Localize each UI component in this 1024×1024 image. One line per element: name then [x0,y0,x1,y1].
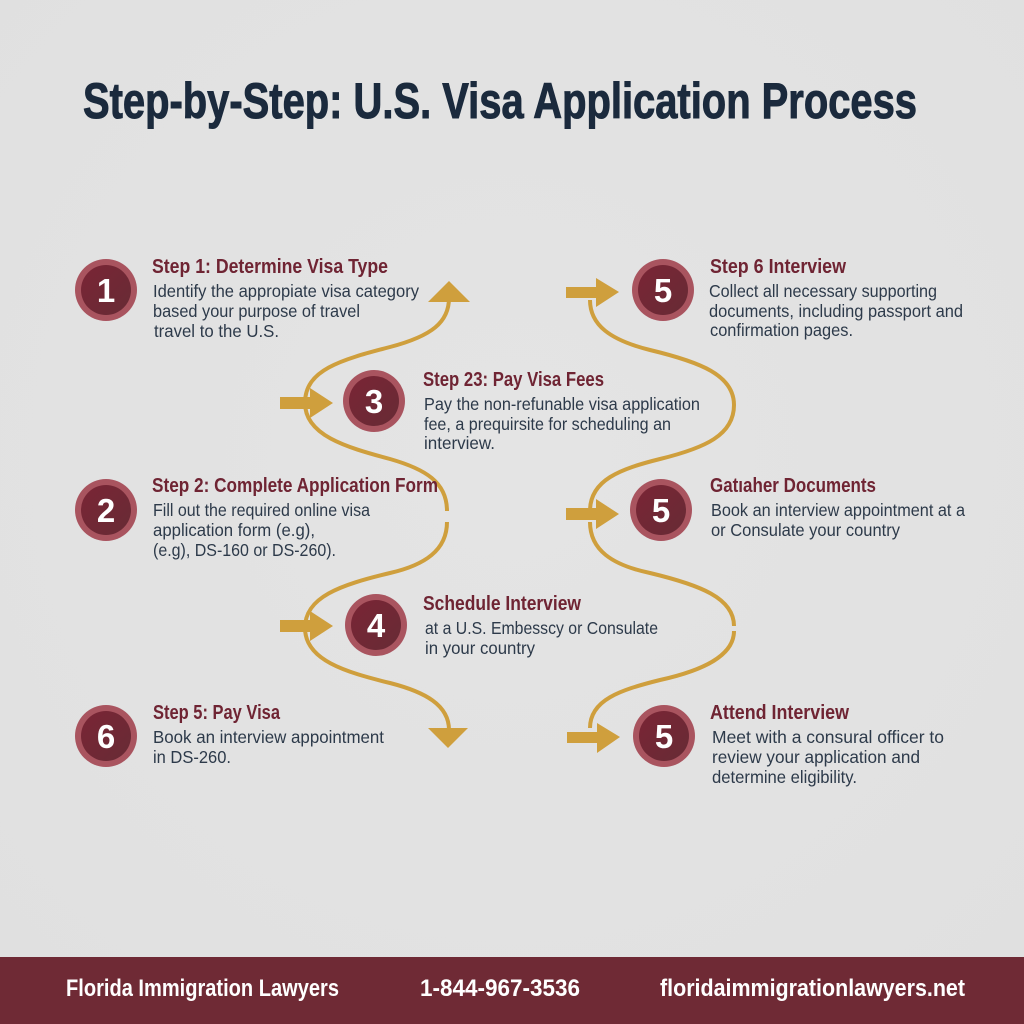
badge 2 [75,479,137,541]
step 6 text: Collect all necessary supporting [709,281,937,301]
attend interview text: determine eligibility. [712,767,857,787]
badge 3 [343,370,405,432]
arrow: into step 4 [280,611,333,641]
step 5 text: Book an interview appointment [153,727,384,747]
gather documents [630,475,965,541]
step 6 text: confirmation pages. [710,320,853,340]
badge 5 bottom [633,705,695,767]
left connector curve [305,298,449,730]
step 6 interview [632,256,963,340]
step 2 text: Fill out the required online visa [153,500,370,520]
badge 1: 1 [97,272,115,309]
step 4 text: at a U.S. Embesscy or Consulate [425,618,658,638]
step 6 text [709,281,963,340]
step 5 text [153,727,384,767]
badge 5 bottom: 5 [655,718,673,755]
arrow: into step 6 interview [566,278,619,307]
attend interview text: Meet with a consural officer to [712,727,944,747]
step 3 text [424,394,700,453]
gather documents text [711,500,965,540]
step 2 text: (e.g), DS-160 or DS-260). [153,540,336,560]
badge 2: 2 [97,492,115,529]
arrow: down from step 4 [428,728,468,748]
step 1 heading: Step 1: Determine Visa Type [152,256,388,278]
step 1 text: based your purpose of travel [153,301,360,321]
badge 4 [345,594,407,656]
step 1 [75,256,419,341]
attend interview text [712,727,944,787]
step 2 [75,475,438,560]
step 4 [345,593,658,658]
attend interview text: review your application and [712,747,920,767]
step 3 text: fee, a prequirsite for scheduling an [424,414,671,434]
footer bar [0,957,1024,1024]
badge 3: 3 [365,383,383,420]
arrow: into step 3 [280,388,333,418]
step 6 heading: Step 6 Interview [710,256,846,278]
step 4 heading: Schedule Interview [423,593,581,615]
attend interview heading: Attend Interview [710,702,849,724]
badge 6 [75,705,137,767]
attend interview [633,702,944,787]
gather documents heading: Gatıaher Documents [710,475,876,497]
step 2 text [153,500,370,560]
step 4 text: in your country [425,638,535,658]
step 5 pay visa [75,702,384,767]
step 1 text: travel to the U.S. [154,321,279,341]
right connector curve [590,300,734,728]
footer phone: 1-844-967-3536 [420,975,580,1002]
badge 1 [75,259,137,321]
step 3 text: Pay the non-refunable visa application [424,394,700,414]
step 6 text: documents, including passport and [709,301,963,321]
step 3 heading: Step 23: Pay Visa Fees [423,369,604,391]
footer firm name: Florida Immigration Lawyers [66,975,339,1002]
badge 5 middle [630,479,692,541]
step 2 heading: Step 2: Complete Application Form [152,475,438,497]
step 2 text: application form (e.g), [153,520,315,540]
gather documents text: or Consulate your country [711,520,900,540]
step 1 text [153,281,419,341]
step 5 text: in DS-260. [153,747,231,767]
step 3 text: interview. [424,433,495,453]
gather documents text: Book an interview appointment at a [711,500,965,520]
badge 5 middle: 5 [652,492,670,529]
step 3 [343,369,700,453]
footer website: floridaimmigrationlawyers.net [660,975,965,1002]
step 1 text: Identify the appropiate visa category [153,281,419,301]
badge 5 top [632,259,694,321]
badge 5 top: 5 [654,272,672,309]
arrow: into gather documents [566,499,619,529]
arrow: into attend interview [567,723,620,753]
step 4 text [425,618,658,658]
badge 4: 4 [367,607,386,644]
badge 6: 6 [97,718,115,755]
arrow: up to step 1 region [428,281,470,302]
step 5 heading: Step 5: Pay Visa [153,702,281,724]
